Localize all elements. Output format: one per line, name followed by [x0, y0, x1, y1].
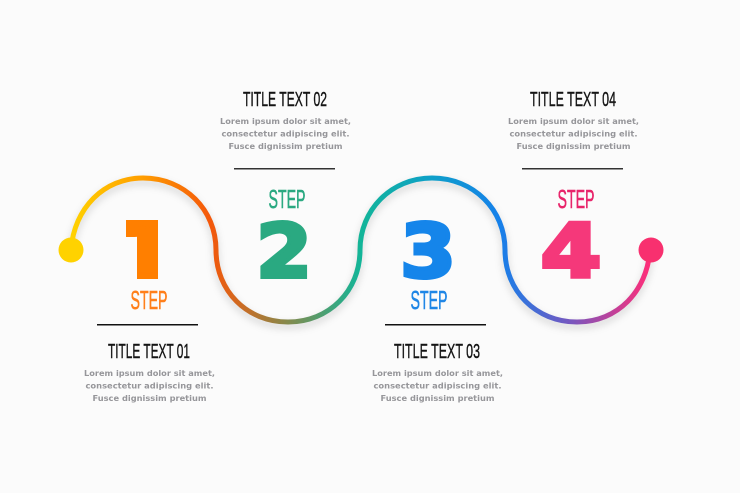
step label 1: STEP	[130, 285, 168, 315]
description 3: consectetur adipiscing elit.	[374, 382, 502, 390]
description 1: consectetur adipiscing elit.	[86, 382, 214, 390]
number 2: 2	[256, 210, 312, 295]
wave path connector	[71, 178, 650, 322]
description 1	[84, 369, 215, 403]
description 3	[372, 369, 503, 403]
end dot	[638, 238, 664, 262]
description 2: Fusce dignissim pretium	[228, 142, 342, 151]
divider 1	[97, 324, 198, 326]
divider 3	[385, 324, 486, 326]
description 4	[508, 117, 639, 151]
description 1: Lorem ipsum dolor sit amet,	[84, 369, 215, 378]
title 4: TITLE TEXT 04	[530, 89, 616, 111]
description 4: Fusce dignissim pretium	[516, 142, 630, 151]
title 1: TITLE TEXT 01	[108, 341, 190, 363]
divider 2	[234, 168, 335, 170]
step label 4: STEP	[558, 184, 594, 214]
step 3	[372, 210, 503, 403]
start dot	[58, 238, 84, 262]
number 3: 3	[400, 210, 456, 295]
wave path shadow	[71, 182, 650, 326]
description 2	[220, 117, 351, 151]
description 4: consectetur adipiscing elit.	[510, 130, 638, 138]
description 1: Fusce dignissim pretium	[92, 394, 206, 403]
step 2	[220, 89, 351, 295]
description 4: Lorem ipsum dolor sit amet,	[508, 117, 639, 126]
divider 4	[522, 168, 623, 170]
description 2: consectetur adipiscing elit.	[222, 130, 350, 138]
number 4: 4	[541, 209, 601, 295]
title 3: TITLE TEXT 03	[394, 341, 480, 363]
step label 2: STEP	[268, 184, 306, 214]
description 2: Lorem ipsum dolor sit amet,	[220, 117, 351, 126]
title 2: TITLE TEXT 02	[243, 89, 327, 111]
number 1: 1	[120, 205, 172, 297]
step 1	[84, 205, 215, 403]
step 4	[508, 89, 639, 295]
step label 3: STEP	[410, 285, 448, 315]
description 3: Lorem ipsum dolor sit amet,	[372, 369, 503, 378]
description 3: Fusce dignissim pretium	[380, 394, 494, 403]
